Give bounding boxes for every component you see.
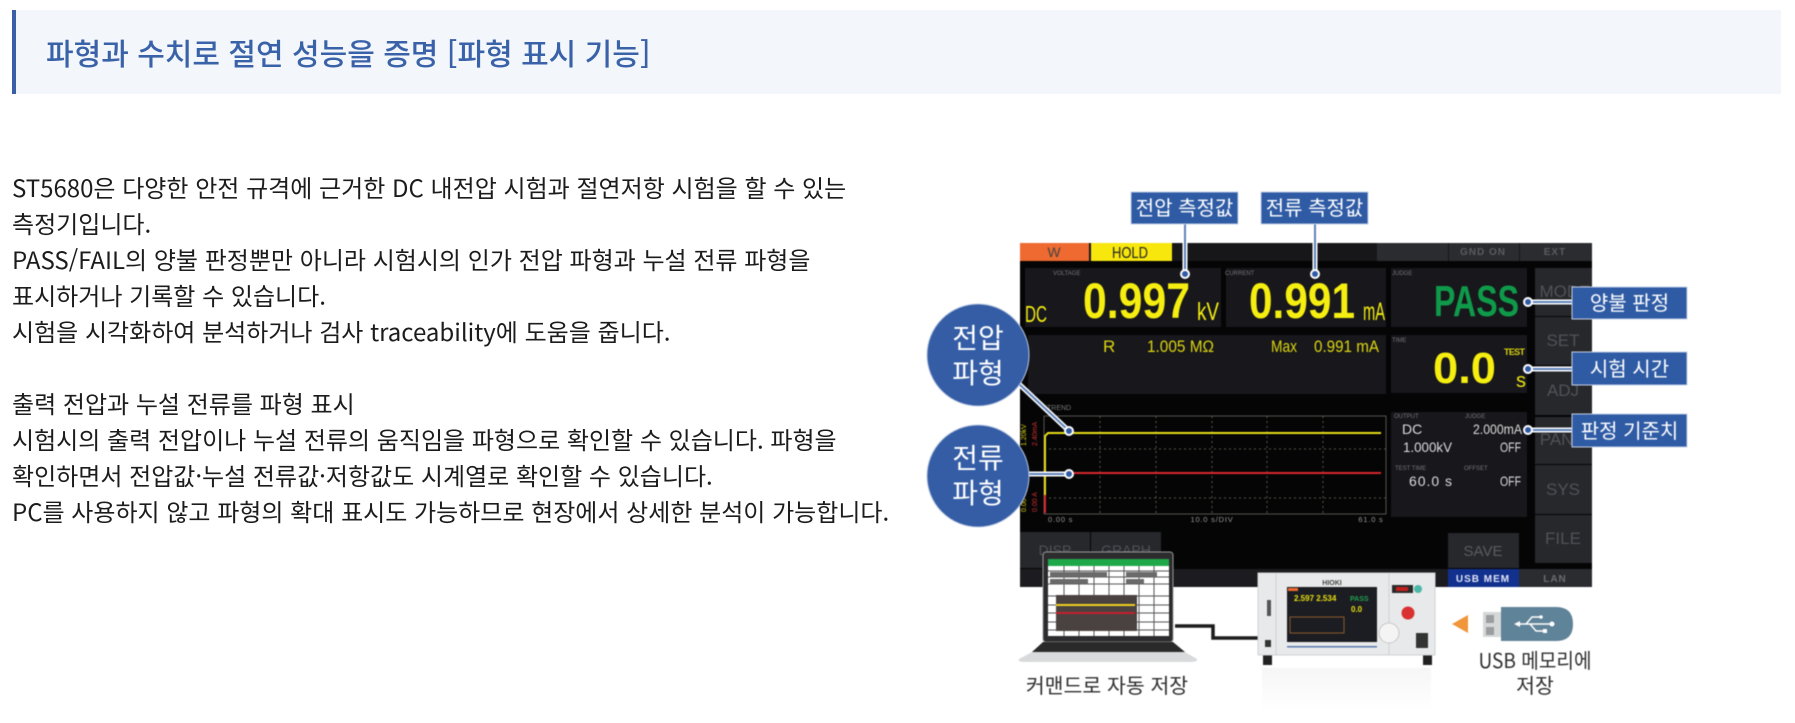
text block: product introduction xyxy=(12,169,846,348)
status bar: HOLD xyxy=(1112,245,1148,262)
waveform chart: 10.0 s/DIV xyxy=(1190,515,1234,524)
instrument screen xyxy=(1020,243,1594,587)
current reading: 0.991 xyxy=(1249,273,1355,329)
text block: product introduction: 측정기입니다. xyxy=(12,205,151,240)
side buttons: MODE xyxy=(1540,282,1590,301)
secondary readings: 1.005 MΩ xyxy=(1147,337,1214,356)
text block: waveform display description: 시험시의 출력 전압이나 누설 전류의 움직임을 파형으로 확인할 수 있습니다. 파형을 xyxy=(12,421,837,456)
callout: pass/fail judgement xyxy=(1572,287,1687,319)
time panel: TEST xyxy=(1504,347,1526,357)
text block: waveform display description: 출력 전압과 누설 전류를 파형 표시 xyxy=(12,385,355,420)
text block: waveform display description: PC를 사용하지 않고 파형의 확대 표시도 가능하므로 현장에서 상세한 분석이 가능합니다. xyxy=(12,493,889,528)
title banner xyxy=(12,10,1781,94)
current reading: CURRENT xyxy=(1225,271,1255,277)
time panel xyxy=(1391,335,1527,393)
current waveform xyxy=(1045,473,1381,513)
waveform chart: 0.00 s xyxy=(1048,515,1073,524)
callout: current measurement: 전류 측정값 xyxy=(1266,192,1363,221)
side buttons: FILE xyxy=(1545,529,1581,548)
callout: judgement threshold: 판정 기준치 xyxy=(1581,415,1678,444)
waveform chart: 2.40mA xyxy=(1032,422,1039,446)
waveform chart: 0.00 V xyxy=(1021,491,1028,512)
bottom buttons: DISP xyxy=(1039,542,1071,558)
label: save to USB memory: USB 메모리에 xyxy=(1478,644,1592,674)
bottom buttons: USB MEM xyxy=(1456,574,1510,585)
callout: test time xyxy=(1572,352,1687,385)
leader lines xyxy=(1018,224,1572,474)
icon: instrument: 2.597 2.534 xyxy=(1294,594,1337,603)
waveform chart: 0.00 A xyxy=(1032,492,1039,512)
title banner: 파형과 수치로 절연 성능을 증명 [파형 표시 기능] xyxy=(46,30,651,74)
waveform chart: 61.0 s xyxy=(1358,515,1384,524)
voltage reading: kV xyxy=(1197,298,1219,326)
settings panel: JUDGE xyxy=(1465,414,1485,420)
waveform chart: 1.20kV xyxy=(1021,424,1028,446)
badge: current waveform xyxy=(927,425,1029,527)
settings panel: OFF xyxy=(1500,439,1521,455)
settings panel: 60.0 s xyxy=(1409,473,1452,489)
side buttons: SYS xyxy=(1546,480,1580,499)
bottom buttons: GRAPH xyxy=(1101,542,1151,558)
badge: voltage waveform xyxy=(927,304,1029,406)
voltage reading: 0.997 xyxy=(1083,273,1190,329)
badge: current waveform: 전류 xyxy=(952,437,1004,477)
side buttons: PANEL xyxy=(1540,430,1594,449)
side buttons: SET xyxy=(1546,331,1580,350)
side buttons: ADJ xyxy=(1547,381,1579,400)
badge: voltage waveform: 파형 xyxy=(952,352,1004,392)
settings panel xyxy=(1391,412,1527,517)
text block: product introduction: 표시하거나 기록할 수 있습니다. xyxy=(12,277,326,312)
status bar: W xyxy=(1047,244,1061,260)
callout: test time: 시험 시간 xyxy=(1590,353,1669,382)
waveform chart xyxy=(1021,405,1386,524)
icon: instrument: HIOKI xyxy=(1322,580,1342,587)
settings panel: 2.000mA xyxy=(1473,421,1523,437)
waveform chart: TREND xyxy=(1047,405,1071,412)
badge: current waveform: 파형 xyxy=(952,472,1004,512)
text block: waveform display description xyxy=(12,385,889,528)
status bar: GND ON xyxy=(1460,247,1506,258)
secondary readings: Max xyxy=(1271,337,1297,356)
settings panel: OFFSET xyxy=(1464,466,1488,472)
current reading: mA xyxy=(1363,298,1385,326)
side buttons xyxy=(1535,268,1594,563)
voltage reading: VOLTAGE xyxy=(1053,271,1080,277)
leader dots xyxy=(1065,270,1532,478)
callout: voltage measurement: 전압 측정값 xyxy=(1136,192,1233,221)
text block: product introduction: PASS/FAIL의 양불 판정뿐만 아니라 시험시의 인가 전압 파형과 누설 전류 파형을 xyxy=(12,241,810,276)
text block: product introduction: ST5680은 다양한 안전 규격에 근거한 DC 내전압 시험과 절연저항 시험을 할 수 있는 xyxy=(12,169,846,204)
judge panel: PASS xyxy=(1434,277,1519,326)
text block: waveform display description: 확인하면서 전압값·누설 전류값·저항값도 시계열로 확인할 수 있습니다. xyxy=(12,457,713,492)
judge panel: JUDGE xyxy=(1392,271,1412,277)
icon: instrument: 0.0 xyxy=(1351,605,1363,614)
bottom buttons: LAN xyxy=(1543,574,1567,585)
status bar xyxy=(1020,243,1592,262)
time panel: 0.0 xyxy=(1433,344,1496,393)
badge: voltage waveform: 전압 xyxy=(952,317,1004,357)
icon: laptop xyxy=(1019,552,1197,662)
judge panel xyxy=(1391,268,1527,327)
settings panel: 1.000kV xyxy=(1403,439,1453,455)
label: automatic save by command: 커맨드로 자동 저장 xyxy=(1026,669,1188,699)
arrow: orange triangle xyxy=(1452,615,1468,633)
secondary readings xyxy=(1028,335,1386,394)
icon: USB memory xyxy=(1483,607,1573,641)
label: save to USB memory: 저장 xyxy=(1516,669,1554,699)
settings panel: OUTPUT xyxy=(1394,414,1419,420)
secondary readings: R xyxy=(1103,337,1115,356)
callout: pass/fail judgement: 양불 판정 xyxy=(1590,287,1669,316)
icon: instrument xyxy=(1258,573,1435,665)
instrument reflection xyxy=(1262,668,1431,712)
bottom buttons xyxy=(1020,532,1592,587)
status bar: EXT xyxy=(1544,247,1566,258)
time panel: s xyxy=(1516,370,1526,392)
settings panel: OFF xyxy=(1500,473,1521,489)
settings panel: TEST TIME xyxy=(1395,466,1426,472)
settings panel: DC xyxy=(1402,421,1422,437)
time panel: TIME xyxy=(1392,338,1406,344)
icon: instrument: PASS xyxy=(1350,596,1369,603)
text block: product introduction: 시험을 시각화하여 분석하거나 검사 traceability에 도움을 줍니다. xyxy=(12,313,670,348)
secondary readings: 0.991 mA xyxy=(1314,337,1380,356)
cable xyxy=(1175,626,1258,638)
voltage waveform xyxy=(1045,433,1381,495)
bottom buttons: SAVE xyxy=(1464,543,1502,560)
label: save to USB memory xyxy=(1478,644,1592,699)
voltage reading xyxy=(1025,268,1221,329)
voltage reading: DC xyxy=(1025,301,1047,327)
